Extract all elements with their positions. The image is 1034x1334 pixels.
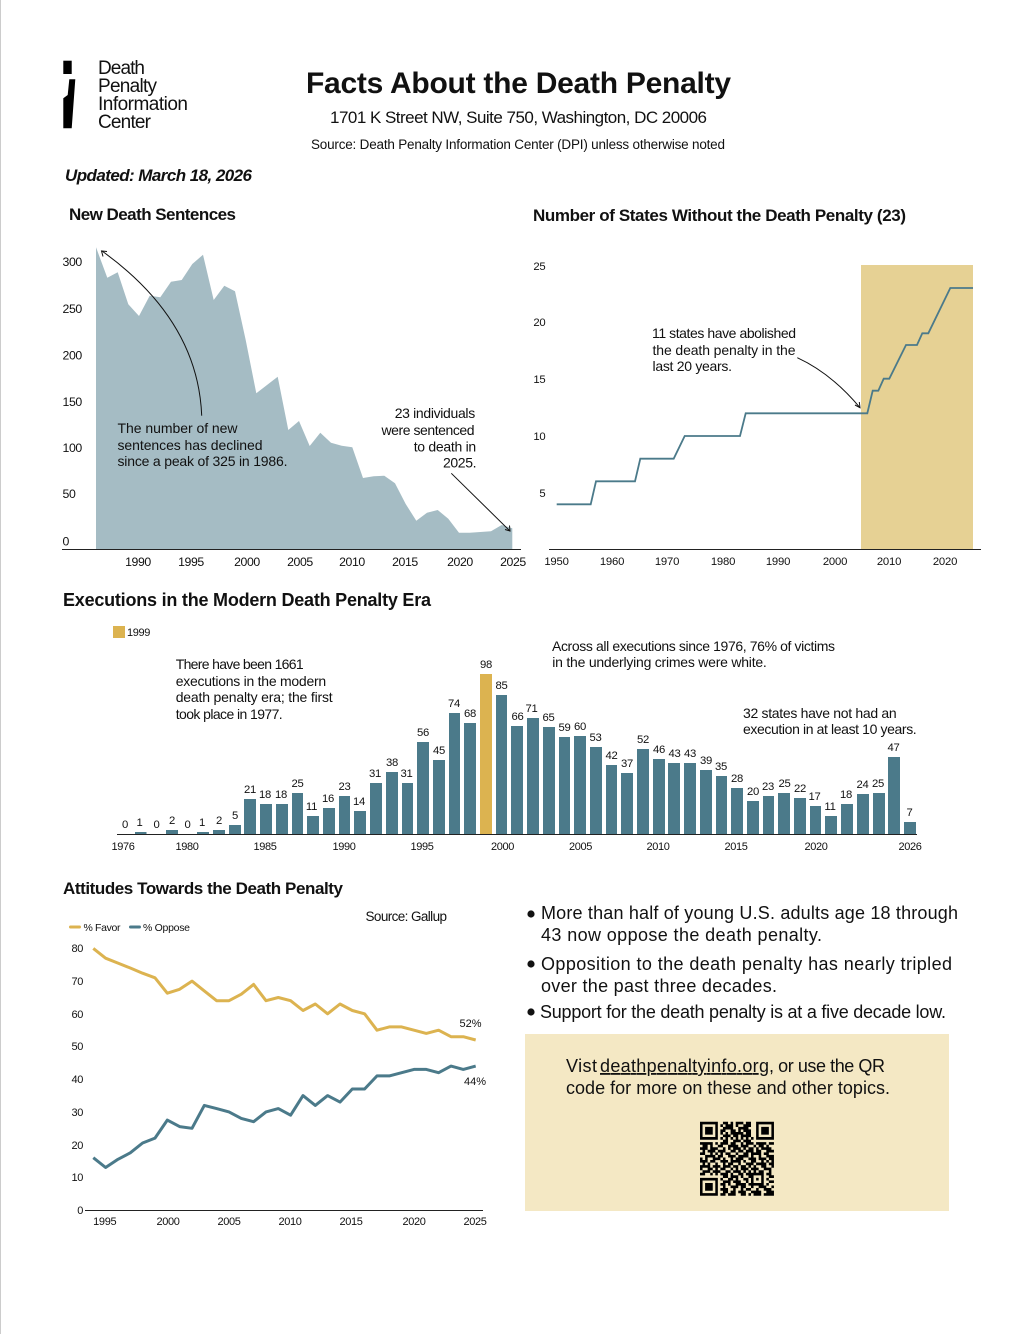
legend: % Favor <box>84 922 121 934</box>
callout panel <box>525 1034 949 1211</box>
x axis labels: 2020 <box>933 556 957 568</box>
callout text: Vist <box>566 1056 597 1076</box>
bar value labels: 5 <box>232 810 238 822</box>
annotation: 32 states: 32 states have not had an <box>743 705 897 721</box>
x axis labels: 1960 <box>600 556 624 568</box>
x axis labels: 2015 <box>724 841 748 853</box>
y axis labels: 20 <box>533 317 546 329</box>
y axis labels: 0 <box>77 1205 83 1217</box>
annotation: states abolished: 11 states have abolished <box>652 325 796 341</box>
annotation: 1661 executions <box>176 656 333 722</box>
bar value labels: 16 <box>322 793 334 805</box>
x axis labels: 2015 <box>339 1216 363 1228</box>
bar value labels: 42 <box>606 750 617 762</box>
annotation: states abolished: the death penalty in the <box>652 342 796 358</box>
bar value labels: 23 <box>339 781 350 793</box>
oppose line <box>93 1066 476 1168</box>
bar value labels: 0 <box>122 819 128 831</box>
bar value labels: 53 <box>590 732 601 744</box>
bar value labels: 7 <box>907 807 913 819</box>
x axis labels: 2005 <box>217 1216 241 1228</box>
x axis labels: 2005 <box>569 841 592 853</box>
x axis labels: 1995 <box>178 555 204 569</box>
end labels: 52% <box>460 1018 482 1030</box>
bars <box>135 674 916 834</box>
legend <box>69 922 190 934</box>
heading: Attitudes: Attitudes Towards the Death Penalty <box>63 879 344 898</box>
bar value labels: 11 <box>824 801 836 813</box>
logo: Death Penalty Information Center: Center <box>98 112 152 133</box>
bar value labels: 25 <box>779 778 790 790</box>
x axis labels: 1990 <box>766 556 790 568</box>
arrow to 2025 <box>451 473 510 531</box>
x axis labels: 2020 <box>804 841 828 853</box>
bar value labels: 46 <box>653 744 665 756</box>
y axis labels: 50 <box>62 487 76 501</box>
bar value labels: 68 <box>464 708 476 720</box>
arrow to 1986 peak <box>102 251 202 416</box>
x axis labels: 1995 <box>410 841 434 853</box>
bullet list: Opposition to the death penalty has nearly tripled <box>541 954 952 974</box>
x axis labels: 2020 <box>447 555 473 569</box>
updated date: Updated: March 18, 2026 <box>65 166 253 185</box>
bar value labels: 66 <box>512 711 523 723</box>
bar value labels: 35 <box>715 761 727 773</box>
y axis labels: 60 <box>71 1009 83 1021</box>
bar value labels: 31 <box>369 768 381 780</box>
bar value labels: 31 <box>401 768 412 780</box>
bar value labels: 18 <box>840 789 852 801</box>
x axis labels: 1976 <box>111 841 135 853</box>
bar value labels: 14 <box>353 796 365 808</box>
bar value labels: 71 <box>526 703 537 715</box>
annotation: peak decline: sentences has declined <box>118 437 262 453</box>
bar value labels: 1 <box>199 817 205 829</box>
y axis labels: 100 <box>62 441 82 455</box>
bar value labels: 0 <box>185 819 191 831</box>
annotation: 2025 sentences: 2025. <box>443 454 476 470</box>
logo: Death Penalty Information Center: Penalty <box>98 76 158 97</box>
end labels <box>460 1018 486 1088</box>
bullet list: More than half of young U.S. adults age 18 through <box>541 903 958 923</box>
callout text: deathpenaltyinfo.org <box>600 1056 769 1076</box>
logo: Death Penalty Information Center <box>63 58 188 133</box>
line chart: attitudes <box>69 922 487 1228</box>
bar value labels: 59 <box>559 722 570 734</box>
bar value labels: 25 <box>872 778 884 790</box>
annotation: states abolished: last 20 years. <box>652 358 732 374</box>
bar value labels: 45 <box>433 745 445 757</box>
bar value labels: 21 <box>244 784 256 796</box>
legend: 1999 <box>113 626 150 639</box>
area: sentences per year <box>96 247 512 549</box>
bar value labels: 11 <box>306 801 317 813</box>
annotation: 1661 executions: There have been 1661 <box>176 656 304 672</box>
bar value labels: 56 <box>417 727 429 739</box>
y axis labels: 10 <box>71 1172 83 1184</box>
annotation: 2025 sentences: were sentenced <box>380 422 474 438</box>
legend: % Oppose <box>143 922 190 934</box>
bullet list: over the past three decades. <box>541 976 777 996</box>
heading: New Death Sentences: New Death Sentences <box>69 205 236 224</box>
bar value labels: 25 <box>292 778 303 790</box>
y axis labels: 15 <box>533 374 546 386</box>
bar value labels: 2 <box>169 815 175 827</box>
x axis labels <box>544 556 957 568</box>
annotation: victims: in the underlying crimes were white. <box>552 654 767 670</box>
y axis labels: 20 <box>71 1140 83 1152</box>
arrow to 2006 <box>797 358 860 408</box>
bar value labels: 65 <box>543 712 554 724</box>
bar value labels: 43 <box>669 748 680 760</box>
end labels: 44% <box>464 1076 486 1088</box>
bar value labels: 20 <box>747 786 759 798</box>
area chart: new death sentences <box>62 247 526 569</box>
QR code <box>700 1123 774 1194</box>
x axis labels: 2010 <box>877 556 901 568</box>
x axis labels: 1985 <box>253 841 277 853</box>
bar value labels: 74 <box>448 698 460 710</box>
bar value labels: 0 <box>154 819 160 831</box>
bar value labels: 52 <box>637 734 649 746</box>
annotation: 32 states <box>743 705 917 737</box>
y axis labels: 10 <box>533 431 546 443</box>
heading: Executions: Executions in the Modern Death Penalty Era <box>63 590 432 610</box>
x axis labels: 2026 <box>898 841 922 853</box>
y axis labels <box>62 255 82 548</box>
callout text <box>566 1056 890 1098</box>
bar value labels: 17 <box>809 791 820 803</box>
y axis labels: 50 <box>71 1041 83 1053</box>
bullet list: 43 now oppose the death penalty. <box>541 925 822 945</box>
bar value labels: 28 <box>731 773 743 785</box>
x axis labels: 2010 <box>339 555 365 569</box>
x axis labels: 2000 <box>234 555 260 569</box>
y axis labels: 200 <box>62 348 82 362</box>
y axis labels: 250 <box>62 302 82 316</box>
x axis labels: 1990 <box>125 555 151 569</box>
bar value labels: 1 <box>137 817 143 829</box>
x axis labels: 1995 <box>93 1216 116 1228</box>
x axis labels: 2010 <box>646 841 670 853</box>
bar value labels: 43 <box>684 748 696 760</box>
step line <box>557 288 973 504</box>
annotation: 2025 sentences: to death in <box>414 438 476 454</box>
x axis labels: 2020 <box>402 1216 426 1228</box>
x axis labels: 1980 <box>711 556 735 568</box>
address: 1701 K Street NW, Suite 750, Washington, DC 20006 <box>330 108 707 127</box>
y axis labels <box>533 261 546 500</box>
annotation: 32 states: execution in at least 10 years. <box>743 721 917 737</box>
bullet list: Support for the death penalty is at a five decade low. <box>540 1002 946 1022</box>
annotation: 1661 executions: executions in the modern <box>176 673 326 689</box>
logo: Death Penalty Information Center: Information <box>98 94 188 115</box>
y axis labels: 40 <box>71 1074 83 1086</box>
bar value labels: 39 <box>700 755 712 767</box>
callout text: , or use the QR <box>769 1056 885 1076</box>
annotation: victims <box>552 638 835 670</box>
y axis labels: 5 <box>539 488 546 500</box>
x axis labels: 1990 <box>332 841 356 853</box>
bar value labels: 24 <box>857 779 868 791</box>
bullet list <box>527 903 958 1022</box>
bar value labels: 22 <box>794 783 806 795</box>
annotation: victims: Across all executions since 1976, 76% of victims <box>552 638 835 654</box>
annotation: 1661 executions: death penalty era; the first <box>176 689 333 705</box>
y axis labels: 80 <box>71 943 83 955</box>
title: Facts About the Death Penalty <box>306 67 731 100</box>
x axis labels: 1970 <box>655 556 679 568</box>
y axis labels: 70 <box>71 976 83 988</box>
bar value labels <box>122 659 913 831</box>
highlight band: last 20 years <box>861 265 973 549</box>
x axis labels: 2025 <box>500 555 526 569</box>
bar value labels: 23 <box>762 781 774 793</box>
x axis labels <box>93 1216 487 1228</box>
bar value labels: 2 <box>216 815 222 827</box>
bar chart: executions per year <box>111 659 922 853</box>
y axis labels <box>71 943 83 1217</box>
annotation: 2025 sentences: 23 individuals <box>395 405 475 421</box>
callout text: code for more on these and other topics. <box>566 1078 890 1098</box>
bar value labels: 85 <box>496 680 507 692</box>
y axis labels: 30 <box>71 1107 83 1119</box>
x axis labels: 2000 <box>491 841 514 853</box>
y axis labels: 150 <box>62 395 82 409</box>
x axis labels <box>125 555 526 569</box>
source: Gallup: Source: Gallup <box>366 909 447 924</box>
annotation: states abolished <box>652 325 796 374</box>
y axis labels: 0 <box>62 534 70 548</box>
bar value labels: 60 <box>574 721 586 733</box>
annotation: 2025 sentences <box>380 405 476 470</box>
favor line <box>93 948 476 1040</box>
bar value labels: 98 <box>480 659 492 671</box>
line chart: states without the death penalty <box>533 261 981 568</box>
annotation: 1661 executions: took place in 1977. <box>176 706 283 722</box>
bar value labels: 18 <box>275 789 287 801</box>
bar value labels: 38 <box>386 757 398 769</box>
annotation: peak decline <box>118 420 288 469</box>
y axis labels: 300 <box>62 255 82 269</box>
x axis labels: 2005 <box>287 555 313 569</box>
y axis labels: 25 <box>533 261 546 273</box>
x axis labels <box>111 841 922 853</box>
bar value labels: 18 <box>259 789 271 801</box>
x axis labels: 2025 <box>463 1216 487 1228</box>
bar value labels: 47 <box>888 742 899 754</box>
annotation: peak decline: since a peak of 325 in 1986. <box>118 453 288 469</box>
x axis labels: 2010 <box>278 1216 302 1228</box>
heading: Number of States Without the Death Penalty: Number of States Without the Death Penalty (23) <box>533 206 906 225</box>
x axis labels: 1950 <box>544 556 569 568</box>
logo: Death Penalty Information Center: Death <box>98 58 145 79</box>
x axis labels: 2000 <box>823 556 847 568</box>
annotation: peak decline: The number of new <box>118 420 238 436</box>
x axis labels: 1980 <box>175 841 199 853</box>
source line: Source: Death Penalty Information Center (DPI) unless otherwise noted <box>311 137 725 152</box>
x axis labels: 2000 <box>156 1216 180 1228</box>
legend: 1999: 1999 <box>127 627 150 639</box>
bar value labels: 37 <box>621 758 633 770</box>
x axis labels: 2015 <box>392 555 418 569</box>
